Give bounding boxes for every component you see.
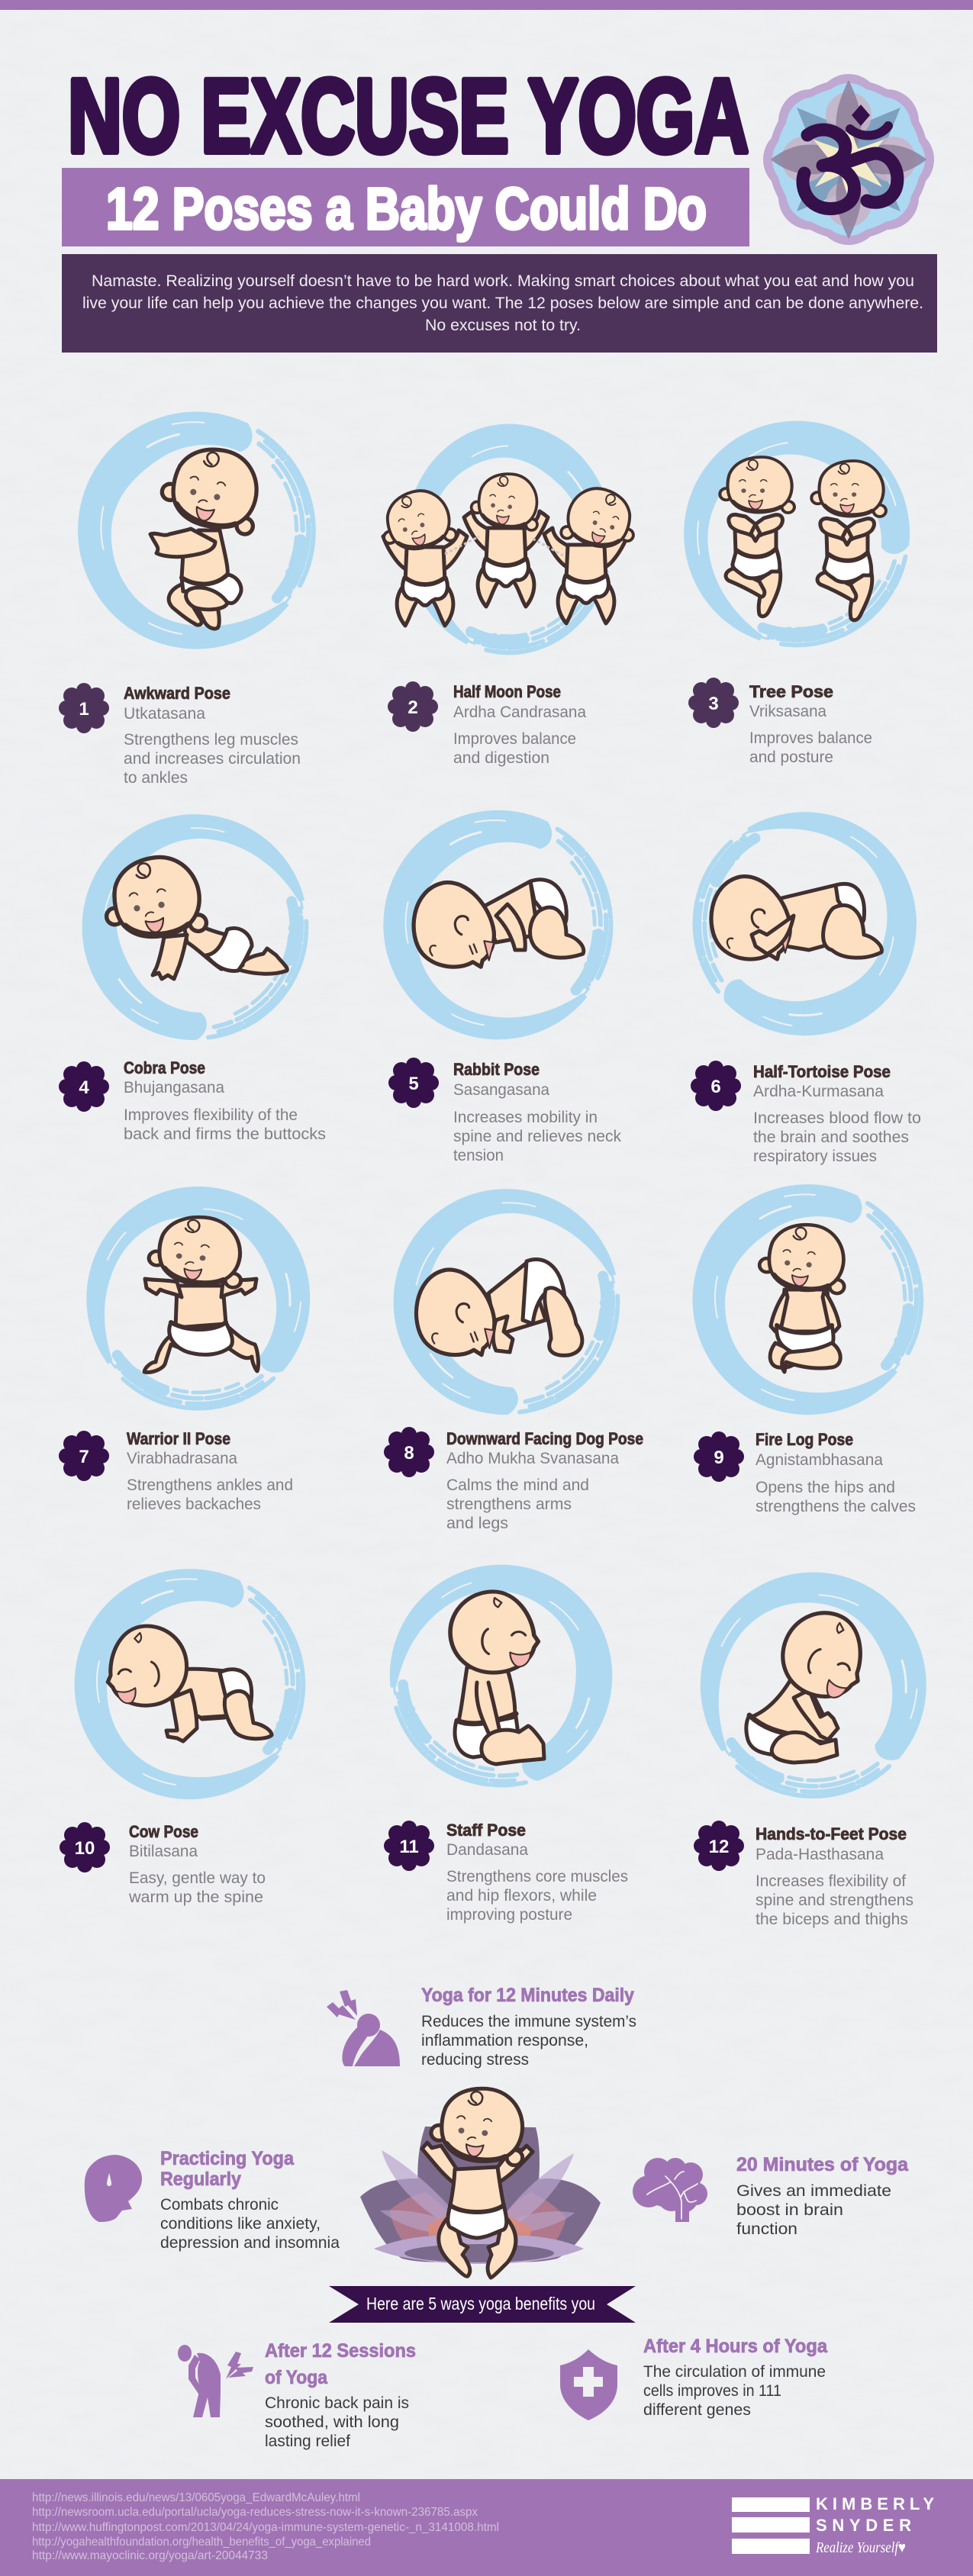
caption: Improves flexibility of the — [124, 1106, 298, 1124]
panel: pose 12 hands to feet — [675, 1547, 952, 1928]
panel: pose 4 cobra — [45, 778, 343, 1143]
logo — [732, 2494, 934, 2556]
number badge: 12 — [709, 1837, 729, 1857]
caption — [124, 1058, 326, 1143]
benefit text: Chronic back pain is — [265, 2394, 409, 2412]
caption: Half-Tortoise Pose — [753, 1062, 891, 1081]
sources: http://news.illinois.edu/news/13/0605yoga_EdwardMcAuley.html — [32, 2491, 360, 2504]
brush ring — [75, 1569, 303, 1799]
logo: KIMBERLY — [816, 2494, 934, 2513]
baby illustration — [414, 880, 584, 967]
brush ring — [675, 1547, 952, 1822]
icon: brain — [633, 2158, 707, 2222]
number badge: 5 — [408, 1074, 419, 1094]
caption: relieves backaches — [127, 1496, 261, 1513]
caption: Calms the mind and — [446, 1476, 589, 1494]
baby illustration — [720, 457, 886, 620]
number badge: 9 — [714, 1447, 724, 1468]
caption: Increases blood flow to — [753, 1109, 921, 1127]
caption: the brain and soothes — [753, 1129, 909, 1146]
brush ring — [78, 412, 314, 649]
subtitle banner: 12 Poses a Baby Could Do — [106, 176, 707, 242]
baby illustration — [422, 2083, 533, 2278]
sources: http://newsroom.ucla.edu/portal/ucla/yoga-reduces-stress-now-it-s-known-236785.aspx — [32, 2506, 478, 2519]
number badge — [384, 1821, 434, 1871]
caption: Bhujangasana — [124, 1079, 224, 1096]
caption: Virabhadrasana — [127, 1450, 237, 1467]
number badge — [384, 1427, 434, 1477]
brush ring — [693, 1184, 921, 1415]
number badge — [388, 681, 438, 732]
baby illustration — [150, 440, 267, 629]
number badge: 10 — [75, 1838, 95, 1859]
sources: http://www.mayoclinic.org/yoga/art-20044733 — [32, 2549, 268, 2562]
icon: head silhouette — [85, 2155, 142, 2222]
benefit text: The circulation of immune — [643, 2363, 826, 2381]
caption: to ankles — [124, 769, 188, 787]
baby illustration — [746, 1599, 880, 1763]
benefit text: Practicing Yoga — [160, 2148, 295, 2169]
caption: and posture — [749, 749, 833, 766]
sources: http://yogahealthfoundation.org/health_benefits_of_yoga_explained — [32, 2536, 371, 2549]
panel: pose 5 rabbit — [383, 810, 621, 1164]
caption: Adho Mukha Svanasana — [446, 1450, 619, 1467]
panel: pose 2 half moon — [374, 398, 643, 767]
caption: and increases circulation — [124, 750, 301, 768]
benefit text: conditions like anxiety, — [160, 2215, 321, 2233]
benefit text: Yoga for 12 Minutes Daily — [421, 1985, 634, 2006]
benefit text: Reduces the immune system’s — [421, 2013, 636, 2030]
baby illustration — [99, 1620, 272, 1741]
icon: stressed person — [327, 1990, 400, 2066]
benefit text: Regularly — [160, 2169, 241, 2190]
caption — [756, 1430, 916, 1515]
benefit text — [421, 1985, 636, 2069]
caption: spine and relieves neck — [453, 1128, 621, 1145]
panel: center baby on lotus — [360, 2083, 601, 2278]
number badge — [688, 678, 739, 728]
caption: Fire Log Pose — [756, 1430, 853, 1449]
benefit text: After 12 Sessions — [265, 2340, 416, 2362]
icon: om mandala — [763, 74, 934, 245]
caption: and hip flexors, while — [446, 1887, 597, 1905]
intro text panel: No excuses not to try. — [425, 317, 581, 334]
panel: pose 1 awkward — [59, 412, 314, 787]
caption — [446, 1429, 643, 1532]
logo: Realize Yourself♥ — [815, 2539, 906, 2556]
brush ring — [652, 389, 941, 677]
number badge — [691, 1061, 741, 1111]
caption: the biceps and thighs — [756, 1911, 908, 1928]
benefit text: 20 Minutes of Yoga — [736, 2154, 909, 2175]
caption: Downward Facing Dog Pose — [446, 1429, 643, 1448]
caption: Opens the hips and — [756, 1479, 895, 1496]
caption — [124, 684, 301, 787]
intro text panel: Namaste. Realizing yourself doesn’t have to be hard work. Making smart choices about what you eat and how you — [92, 272, 914, 290]
caption: Vriksasana — [749, 703, 826, 720]
baby illustration — [711, 877, 881, 959]
caption: Rabbit Pose — [453, 1060, 540, 1079]
caption: Tree Pose — [749, 682, 833, 701]
benefit text — [265, 2340, 416, 2450]
ribbon banner: Here are 5 ways yoga benefits you — [366, 2294, 595, 2314]
number badge — [694, 1821, 744, 1871]
caption: warm up the spine — [128, 1889, 263, 1906]
caption: Sasangasana — [453, 1081, 549, 1099]
caption: Utkatasana — [124, 705, 205, 723]
intro text panel — [62, 254, 937, 353]
number badge — [59, 683, 109, 733]
benefit text: soothed, with long — [265, 2413, 399, 2431]
caption — [127, 1429, 293, 1513]
caption: Bitilasana — [129, 1843, 198, 1860]
benefit text: After 4 Hours of Yoga — [643, 2336, 828, 2357]
panel: pose 9 fire log — [693, 1184, 921, 1515]
caption: improving posture — [446, 1906, 572, 1924]
number badge — [59, 1061, 109, 1112]
caption: Improves balance — [749, 729, 872, 747]
number badge — [388, 1058, 439, 1108]
panel: pose 8 downward dog — [356, 1152, 655, 1532]
caption — [749, 682, 872, 766]
caption: Half Moon Pose — [453, 682, 561, 701]
benefit text: cells improves in 111 — [643, 2382, 781, 2400]
caption: Cobra Pose — [124, 1058, 205, 1077]
caption: Easy, gentle way to — [129, 1869, 266, 1887]
panel: pose 10 cow — [60, 1569, 303, 1906]
caption — [756, 1824, 913, 1928]
benefit text: of Yoga — [265, 2367, 328, 2388]
benefit text — [736, 2154, 909, 2238]
number badge: 8 — [404, 1443, 414, 1463]
caption: Increases flexibility of — [756, 1872, 906, 1890]
brush ring — [383, 810, 611, 1039]
caption: Improves balance — [453, 730, 576, 748]
caption: Agnistambhasana — [756, 1451, 883, 1469]
number badge: 1 — [79, 699, 89, 720]
caption: Strengthens core muscles — [446, 1868, 628, 1885]
benefit text: function — [736, 2220, 797, 2238]
footer — [0, 2479, 973, 2576]
panel: benefit 20 minutes — [633, 2154, 909, 2238]
caption: and digestion — [453, 749, 549, 767]
brush ring — [382, 398, 636, 678]
baby illustration — [99, 852, 287, 979]
number badge: 7 — [79, 1447, 89, 1467]
caption: spine and strengthens — [756, 1892, 913, 1909]
baby illustration — [416, 1259, 582, 1355]
panel: pose 6 half tortoise — [663, 781, 948, 1165]
caption: Hands-to-Feet Pose — [756, 1824, 907, 1843]
caption — [453, 682, 586, 767]
top bar — [0, 0, 973, 10]
number badge: 3 — [708, 694, 719, 714]
logo: SNYDER — [816, 2516, 911, 2535]
sources: http://www.huffingtonpost.com/2013/04/24/yoga-immune-system-genetic-_n_3141008.html — [32, 2521, 499, 2534]
baby illustration — [144, 1213, 258, 1372]
icon: person with back pain — [178, 2345, 253, 2417]
caption: respiratory issues — [753, 1148, 877, 1165]
panel: benefit 12 minutes daily — [327, 1985, 636, 2069]
intro text panel: live your life can help you achieve the changes you want. The 12 poses below are simple and can be done anywhere. — [82, 295, 923, 312]
brush ring — [62, 1161, 335, 1434]
panel: benefit practicing regularly — [85, 2148, 340, 2252]
benefit text: depression and insomnia — [160, 2234, 340, 2252]
baby illustration — [758, 1221, 849, 1372]
caption — [753, 1062, 921, 1165]
number badge: 6 — [710, 1077, 721, 1097]
baby illustration — [450, 1592, 544, 1764]
number badge: 2 — [408, 697, 418, 718]
brush ring — [345, 1518, 659, 1832]
caption: back and firms the buttocks — [124, 1125, 326, 1143]
caption: Strengthens leg muscles — [124, 731, 298, 749]
brush ring — [356, 1152, 655, 1451]
caption: Warrior II Pose — [127, 1429, 230, 1448]
caption: Cow Pose — [129, 1822, 198, 1841]
brush ring — [663, 781, 948, 1067]
benefit text: different genes — [643, 2401, 751, 2419]
ribbon banner — [329, 2286, 636, 2323]
panel: benefit 12 sessions — [178, 2340, 416, 2450]
benefit text: inflammation response, — [421, 2032, 588, 2050]
caption — [453, 1060, 621, 1164]
number badge: 4 — [79, 1077, 89, 1098]
caption — [446, 1821, 628, 1924]
caption: Increases mobility in — [453, 1109, 598, 1126]
benefit text: lasting relief — [265, 2433, 350, 2450]
caption: Dandasana — [446, 1841, 528, 1859]
benefit text: Gives an immediate — [736, 2182, 891, 2200]
baby illustration — [374, 471, 643, 626]
number badge — [694, 1431, 744, 1482]
panel: pose 11 staff — [345, 1518, 659, 1924]
number badge — [59, 1431, 109, 1481]
benefit text: Combats chronic — [160, 2196, 279, 2214]
caption: Ardha-Kurmasana — [753, 1083, 884, 1100]
sources — [32, 2491, 499, 2562]
caption: Strengthens ankles and — [127, 1476, 293, 1494]
caption: strengthens the calves — [756, 1498, 916, 1515]
number badge: 11 — [399, 1837, 419, 1857]
brush ring — [45, 778, 343, 1077]
panel: pose 7 warrior II — [59, 1161, 335, 1513]
benefit text — [643, 2336, 828, 2419]
caption: Ardha Candrasana — [453, 704, 586, 721]
benefit text — [160, 2148, 340, 2252]
icon: shield — [560, 2349, 617, 2420]
benefit text: reducing stress — [421, 2051, 529, 2069]
benefit text: boost in brain — [736, 2201, 843, 2219]
caption: Pada-Hasthasana — [756, 1846, 884, 1863]
caption — [128, 1822, 266, 1906]
caption: tension — [453, 1147, 504, 1164]
panel: benefit 4 hours — [560, 2336, 828, 2420]
caption: and legs — [446, 1515, 508, 1532]
caption: Staff Pose — [446, 1821, 526, 1840]
lotus — [360, 2127, 601, 2264]
panel: pose 3 tree — [652, 389, 941, 766]
caption: strengthens arms — [446, 1496, 572, 1513]
subtitle banner — [62, 168, 749, 246]
number badge — [60, 1822, 110, 1872]
header — [62, 58, 934, 246]
caption: Awkward Pose — [124, 684, 230, 703]
